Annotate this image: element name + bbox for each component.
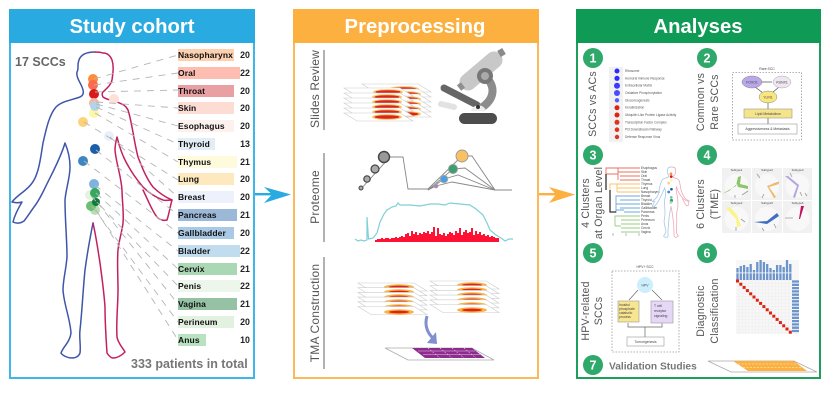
label: Anus [178, 334, 250, 346]
analysis 5: HPV-related SCCs: HPV-related [580, 281, 592, 341]
analysis 7: validation studies: 7 [590, 358, 597, 372]
organ sites [78, 74, 119, 215]
analysis 2: common vs rare SCCs: 2 [704, 52, 711, 66]
label: Perineum: 20 [240, 317, 250, 327]
dot plot: PI3 Downstream Pathway [625, 128, 662, 132]
label: Throat [178, 85, 250, 97]
label: Bladder [178, 245, 250, 257]
label: Cervix [178, 263, 250, 275]
label: Pancreas [178, 209, 250, 221]
label: Nasopharynx [178, 49, 250, 61]
radar tiles [722, 168, 812, 233]
label: Nasopharynx: Nasopharynx [178, 50, 233, 60]
heading: analyses [576, 9, 821, 43]
label: Gallbladder [178, 227, 250, 239]
dot plot: Oxidative Phosphorylation [625, 91, 662, 95]
label: Oral: 22 [240, 68, 250, 78]
label: Skin: 20 [240, 103, 250, 113]
arrow: cohort to preprocessing [255, 187, 291, 203]
dendrogram labels: Skin [641, 170, 647, 174]
dot plot: Defense Response Virus [625, 135, 661, 139]
analysis 4: 6 clusters TME: 4 [704, 148, 711, 162]
dendrogram labels: Penis [641, 214, 649, 218]
pathway diagram: rare SCC: RUNX1 [776, 80, 788, 84]
dot plot: Ubiquitin Like Protein Ligase Activity [625, 113, 677, 117]
analysis 3: 4 clusters at organ level [580, 145, 689, 239]
label: Bladder: Bladder [178, 246, 211, 256]
panel: preprocessing [293, 9, 539, 378]
dendrogram labels: Vagina [641, 230, 651, 234]
text: patient total: 333 patients in total [131, 357, 248, 371]
slide stacks [344, 84, 431, 121]
label: Gallbladder: 20 [240, 228, 250, 238]
label: Nasopharynx: 20 [240, 50, 250, 60]
analysis 1: SCCs vs ACs [583, 48, 677, 142]
pathway diagram: rare SCC: FOXO1 [746, 80, 758, 84]
panel: study cohort [9, 9, 255, 378]
dot plot: Humoral Immune Response [625, 76, 665, 80]
analysis 7: validation studies [583, 355, 817, 375]
dot plot: Ribosome [625, 69, 640, 73]
label: Thyroid: 13 [240, 139, 250, 149]
text: 17 SCCs: 17 SCCs [15, 55, 66, 69]
TMA slide [385, 348, 494, 360]
pathway diagram: HPV+ SCC: process [619, 315, 631, 319]
label: Thymus: Thymus [178, 157, 211, 167]
label: Vagina: Vagina [178, 299, 206, 309]
analysis 6: diagnostic classification: Classification [709, 278, 721, 344]
section: proteome label [308, 153, 324, 242]
pathway diagram: rare SCC: Rare SCC [759, 67, 775, 71]
analysis 2: common vs rare SCCs [695, 48, 802, 140]
label: Esophagus: Esophagus [178, 121, 225, 131]
label: Lung: 20 [240, 174, 250, 184]
dendrogram [606, 168, 640, 236]
pathway diagram: HPV+ SCC: HPV [642, 284, 649, 288]
pathway diagram: rare SCC: YLIN1 [763, 96, 773, 100]
TMA slide stacks [358, 281, 499, 315]
chromatography diagram [359, 150, 512, 190]
dendrogram labels: Esophagus [641, 166, 657, 170]
section: proteome label: Proteome [308, 170, 322, 224]
arrow: slides to TMA [426, 316, 437, 344]
analysis 5: HPV-related SCCs: 5 [590, 246, 597, 260]
label: Vagina [178, 298, 250, 310]
analysis 3: 4 clusters at organ level: at Organ Level [593, 167, 605, 239]
dendrogram labels: Thyroid [641, 198, 652, 202]
heading: preprocessing: Preprocessing [345, 16, 485, 38]
label: Skin [178, 102, 250, 114]
label: Bladder: 22 [240, 246, 250, 256]
radar tiles: Subtype6 [792, 201, 804, 205]
label: Esophagus [178, 120, 250, 132]
dendrogram labels: Lung [641, 186, 648, 190]
dendrogram labels: Thymus [641, 182, 653, 186]
label: Cervix: 21 [240, 264, 250, 274]
dendrogram labels: Oral [641, 174, 647, 178]
pathway diagram: HPV+ SCC: HPV+ SCC [636, 265, 654, 269]
dendrogram labels [641, 166, 660, 234]
dendrogram labels: Bladder [641, 202, 653, 206]
analysis 2: common vs rare SCCs: Common vs [695, 73, 707, 131]
label: Cervix: Cervix [178, 264, 205, 274]
dot plot: Extracellular Matrix [625, 84, 653, 88]
dendrogram labels: Cervix [641, 226, 650, 230]
analysis 6: diagnostic classification: 6 [704, 246, 711, 260]
label: Breast: 20 [240, 192, 250, 202]
analysis 4: 6 clusters TME [695, 145, 812, 233]
pathway diagram: rare SCC: Aggressiveness & Metastasis [745, 127, 790, 131]
analysis 3: 4 clusters at organ level: 3 [590, 148, 597, 162]
radar tiles: Subtype1 [731, 168, 743, 172]
label: Pancreas: Pancreas [178, 210, 217, 220]
dot plot: Gluconeogenesis [625, 98, 650, 102]
label: Pancreas: 21 [240, 210, 250, 220]
panel: analyses [576, 9, 821, 378]
label: Anus: 10 [240, 335, 250, 345]
dot plot: Transcription Factor Complex [625, 120, 667, 124]
pathway diagram: HPV+ SCC: Inositol [619, 303, 630, 307]
dot plot [609, 67, 677, 142]
label: Gallbladder: Gallbladder [178, 228, 226, 238]
pathway diagram: HPV+ SCC: catabolic [619, 311, 633, 315]
label: Lung: Lung [178, 174, 199, 184]
label: Thyroid [178, 138, 250, 150]
radar tiles: Subtype3 [792, 168, 804, 172]
label: Vagina: 21 [240, 299, 250, 309]
analysis 2: common vs rare SCCs: Rare SCCs [709, 74, 721, 130]
label: Skin: Skin [178, 103, 196, 113]
analysis 6: diagnostic classification [695, 243, 799, 344]
dendrogram labels: Gallbladder [641, 206, 658, 210]
icon: microscope [441, 51, 504, 124]
pathway diagram: HPV+ SCC: T cell [654, 304, 662, 308]
label: Thymus [178, 156, 250, 168]
dendrogram labels: Throat [641, 178, 650, 182]
dendrogram labels: Perineum [641, 218, 655, 222]
body outline [12, 52, 172, 358]
heading: study cohort [9, 9, 255, 43]
dendrogram labels: Breast [641, 194, 650, 198]
label: Anus: Anus [178, 335, 200, 345]
pathway diagram: rare SCC [732, 67, 802, 140]
analysis 4: 6 clusters TME: 6 Clusters [695, 179, 707, 229]
label: Penis [178, 280, 250, 292]
pathway diagram: HPV+ SCC: receptor [654, 309, 667, 313]
radar tiles: Subtype2 [761, 168, 773, 172]
analysis 1: SCCs vs ACs: SCCs vs ACs [587, 71, 599, 137]
label: Thymus: 21 [240, 157, 250, 167]
label: Penis: 22 [240, 281, 250, 291]
label: Throat: Throat [178, 86, 205, 96]
analysis 7: validation studies: Validation Studies [609, 362, 697, 372]
pathway diagram: HPV+ SCC: phosphate [619, 307, 635, 311]
analysis 1: SCCs vs ACs: 1 [590, 52, 597, 66]
label: Thyroid: Thyroid [178, 139, 210, 149]
dendrogram labels: Anus [641, 222, 649, 226]
analysis 4: 6 clusters TME: (TME) [709, 189, 721, 219]
dendrogram labels: Nasopharynx [641, 190, 660, 194]
pathway diagram: HPV+ SCC [612, 265, 679, 352]
label: Oral [178, 67, 250, 79]
pathway diagram: HPV+ SCC: signaling [654, 314, 667, 318]
mini body map [652, 167, 689, 237]
label: Perineum: Perineum [178, 317, 218, 327]
leader lines [84, 55, 178, 340]
label: Oral: Oral [178, 68, 195, 78]
analysis 5: HPV-related SCCs: SCCs [593, 297, 605, 325]
radar tiles: Subtype4 [731, 201, 743, 205]
analysis 6: diagnostic classification: Diagnostic [695, 285, 707, 337]
label: Perineum [178, 316, 250, 328]
label: Breast [178, 191, 250, 203]
label: Lung [178, 173, 250, 185]
heading: study cohort: Study cohort [69, 16, 195, 38]
section: slides review label: Slides Review [308, 50, 322, 128]
analysis 5: HPV-related SCCs [580, 243, 679, 352]
confusion matrix [736, 260, 799, 334]
label: Breast: Breast [178, 192, 205, 202]
dot plot: Keratinization [625, 106, 645, 110]
heading: preprocessing [293, 9, 539, 43]
radar tiles: Subtype5 [761, 201, 773, 205]
pathway diagram: rare SCC: Lipid Metabolism [755, 112, 781, 116]
dendrogram labels: Pancreas [641, 210, 655, 214]
analysis 3: 4 clusters at organ level: 4 Clusters [580, 178, 592, 228]
mass spectrum trace [355, 203, 513, 242]
label: Penis: Penis [178, 281, 201, 291]
section: TMA construction label: TMA Construction [308, 264, 322, 362]
label: Throat: 20 [240, 86, 250, 96]
pathway diagram: HPV+ SCC: Tumorigenesis [634, 340, 657, 344]
validation TMA slide [708, 361, 817, 372]
label: Esophagus: 20 [240, 121, 250, 131]
arrow: preprocessing to analyses [539, 187, 575, 203]
heading: analyses: Analyses [653, 16, 743, 38]
